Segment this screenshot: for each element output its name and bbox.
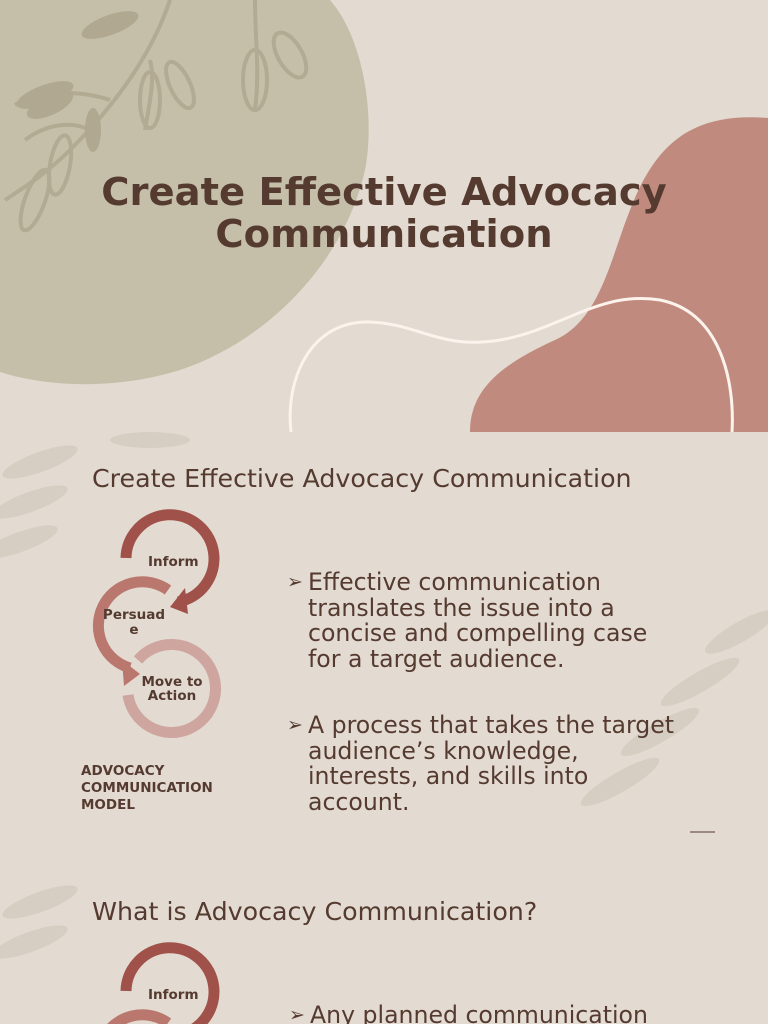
label: Inform: Inform (148, 554, 199, 570)
model caption (81, 763, 213, 813)
label: Move to Action (141, 674, 203, 704)
bullet 2: audience’s knowledge, (308, 737, 579, 765)
label: Move to Action: Move to (141, 674, 203, 690)
bullet 2 (287, 711, 674, 816)
title: Create Effective Advocacy (101, 170, 667, 215)
bullet 1: for a target audience. (308, 645, 565, 673)
bullet 2: A process that takes the target (308, 711, 674, 739)
label: Persuade (103, 607, 165, 638)
slide 1: title slide background (0, 0, 768, 432)
label: Move to Action: Action (148, 688, 196, 704)
model caption: ADVOCACY (81, 763, 164, 779)
bullet 1: Effective communication (308, 568, 601, 596)
label: Persuade: e (129, 622, 139, 638)
bullet 1 (287, 568, 647, 673)
title: Communication (215, 212, 553, 257)
model caption: MODEL (81, 797, 135, 813)
cycle diagram 1 (92, 509, 221, 738)
slide 3 heading: What is Advocacy Communication? (92, 897, 537, 926)
cycle diagram 2 (107, 942, 220, 1024)
label: Persuade: Persuad (103, 607, 165, 623)
bullet 1: translates the issue into a (308, 594, 615, 622)
bullet 2: account. (308, 788, 410, 816)
bullet 2: interests, and skills into (308, 762, 588, 790)
model caption: COMMUNICATION (81, 780, 213, 796)
bullet 1: concise and compelling case (308, 619, 647, 647)
text: ➢ (287, 714, 303, 736)
text: ➢ (287, 571, 303, 593)
slide 2 heading: Create Effective Advocacy Communication (92, 464, 632, 493)
title (101, 170, 667, 257)
label: Inform 2: Inform (148, 987, 199, 1003)
